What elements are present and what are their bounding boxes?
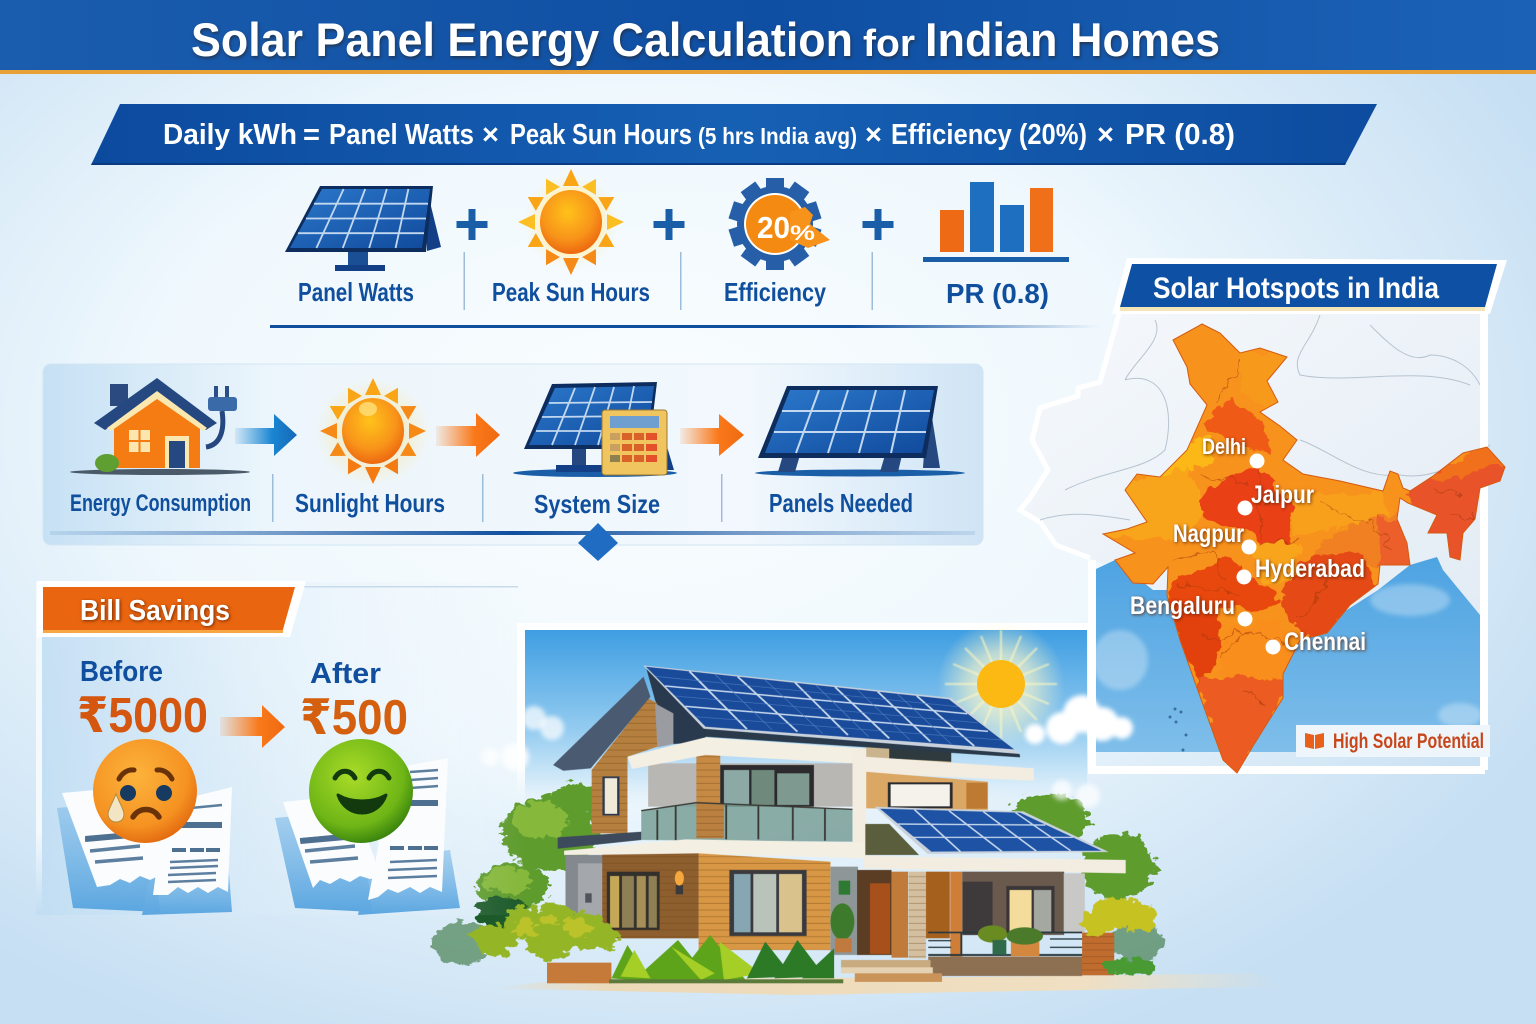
label: PR: PR (0.8) <box>946 278 1049 309</box>
formula bar: × <box>1097 119 1114 151</box>
panel: house illustration <box>432 620 1280 995</box>
formula bar: × <box>865 119 882 151</box>
foreground plants <box>472 897 1158 983</box>
icon: efficiency gear: 20 <box>757 210 790 245</box>
arrow <box>220 705 285 748</box>
formula bar: Panel Watts <box>329 119 474 151</box>
panel: solar hotspots map <box>1020 258 1520 790</box>
upper storey walls <box>648 763 855 807</box>
icon: sun <box>315 378 431 486</box>
icon: solar panel <box>285 186 441 271</box>
icon: solar panel large <box>755 386 965 476</box>
panel: process flow <box>43 364 983 561</box>
icon: PR bar chart <box>923 182 1069 262</box>
plus <box>862 209 894 240</box>
label: panel watts: Panel Watts <box>298 277 414 307</box>
city labels: Delhi <box>1202 434 1246 459</box>
map background land <box>1020 310 1480 640</box>
city labels: Chennai <box>1284 628 1366 656</box>
city markers <box>1236 454 1280 654</box>
porch <box>928 957 1082 976</box>
city labels: Bengaluru <box>1130 592 1235 620</box>
lower solar roof <box>875 807 1109 854</box>
heading: Solar Hotspots in India <box>1153 272 1439 305</box>
heading: Bill Savings <box>80 595 230 627</box>
clouds in sea <box>1092 584 1482 727</box>
heading <box>1112 258 1507 314</box>
balcony <box>641 803 852 842</box>
title: Indian Homes <box>925 13 1220 66</box>
sea <box>1096 557 1480 752</box>
label: peak sun hours: Peak Sun Hours <box>492 277 650 307</box>
city labels: Nagpur <box>1173 520 1244 548</box>
roof and upper structure <box>646 667 706 744</box>
formula bar: = <box>303 119 320 151</box>
value: before amount: ₹5000 <box>77 689 208 743</box>
emoji: happy face <box>309 739 413 843</box>
value: after amount: ₹500 <box>300 691 408 745</box>
formula bar: × <box>482 119 499 151</box>
icon: efficiency gear <box>728 178 830 270</box>
marker: diamond <box>578 523 618 561</box>
icon: happy bills <box>275 739 460 915</box>
label: panels needed: Panels Needed <box>769 488 913 518</box>
legend: High Solar Potential <box>1333 730 1484 753</box>
panel: bill savings <box>36 581 526 915</box>
formula bar: Peak Sun Hours <box>510 119 692 151</box>
icon: sun <box>518 169 624 275</box>
label: sunlight hours: Sunlight Hours <box>295 488 445 518</box>
city labels: Jaipur <box>1251 481 1314 509</box>
arrow <box>436 413 500 457</box>
formula icons row <box>270 169 1100 328</box>
label: efficiency: Efficiency <box>724 277 826 307</box>
plus <box>654 209 684 240</box>
frame <box>1092 312 1485 770</box>
label: before: Before <box>80 656 163 688</box>
title: Solar Panel Energy Calculation <box>191 13 853 66</box>
islands <box>1168 708 1188 752</box>
formula bar: (5 hrs India avg) <box>698 123 857 149</box>
sky <box>481 620 1095 810</box>
trees <box>432 783 1165 965</box>
formula bar: Efficiency (20%) <box>891 119 1087 151</box>
formula bar: PR (0.8) <box>1125 119 1235 151</box>
city labels <box>1130 434 1366 656</box>
title <box>191 13 1220 66</box>
icon: sad bills <box>57 739 232 915</box>
legend <box>1296 725 1490 757</box>
emoji: sad face <box>93 739 197 843</box>
ground <box>490 973 1280 995</box>
main solar roof <box>643 665 1020 757</box>
neighbouring borders <box>1040 315 1490 520</box>
label: system size: System Size <box>534 489 660 519</box>
house <box>432 665 1280 995</box>
label: after: After <box>310 658 381 690</box>
clouds overlapping map frame <box>1025 695 1133 808</box>
icon: house with plug <box>70 378 250 475</box>
icon: efficiency gear: % <box>790 222 815 245</box>
label: energy consumption: Energy Consumption <box>70 490 251 517</box>
title: for <box>863 23 915 65</box>
header banner <box>0 0 1536 74</box>
icon: panel with calculator <box>513 382 677 477</box>
India heat map <box>1102 323 1506 774</box>
arrow <box>680 414 744 456</box>
formula bar <box>91 104 1377 165</box>
plus <box>456 209 488 240</box>
ground floor walls <box>565 855 604 937</box>
heading <box>37 581 306 637</box>
potted plant <box>830 903 854 952</box>
formula bar: Daily kWh <box>163 119 297 151</box>
arrow <box>235 414 297 456</box>
city labels: Hyderabad <box>1255 555 1365 583</box>
sun <box>977 660 1025 708</box>
